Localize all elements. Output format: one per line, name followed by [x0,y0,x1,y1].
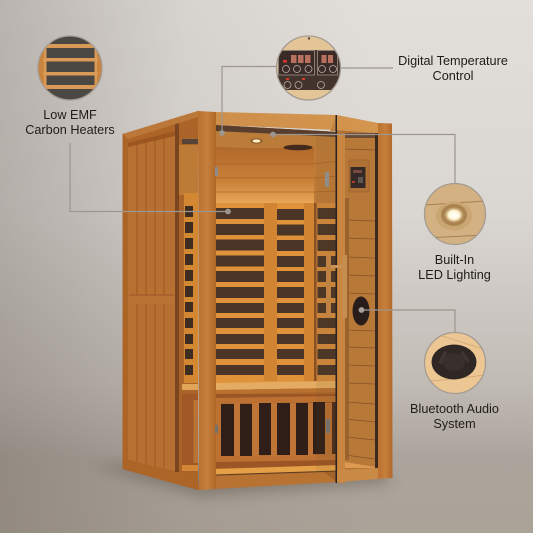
label: low EMF carbon heaters: Carbon Heaters [25,123,115,137]
label: digital temperature control: Digital Temperature [398,54,508,68]
leader line: temperature control left [219,66,276,136]
ceiling speaker vent [284,145,312,150]
label: built-in LED lighting [418,253,491,282]
label: built-in LED lighting: LED Lighting [418,268,491,282]
glass door edge and hardware [215,115,347,483]
under-bench heaters [216,394,338,475]
leader line: LED lighting [270,132,455,184]
floor shadow [90,465,392,496]
label: digital temperature control [398,54,508,83]
label: bluetooth audio system: System [433,417,476,431]
bench [216,381,338,394]
ceiling LED [250,138,262,144]
leader line: temperature control right [341,67,393,69]
label: digital temperature control: Control [433,69,473,83]
label: low EMF carbon heaters [25,108,115,137]
label: bluetooth audio system [410,402,499,431]
wall speaker [352,296,370,326]
leader line: bluetooth audio [359,307,455,333]
right wall section [337,130,378,483]
sauna cabin [122,111,392,490]
leader line: carbon heaters [70,143,231,214]
label: bluetooth audio system: Bluetooth Audio [410,402,499,416]
back wall and ceiling [216,125,338,476]
label: low EMF carbon heaters: Low EMF [43,108,97,122]
icon: carbon heater circle [37,35,104,101]
icon: digital temperature control circle [276,35,342,101]
wall control panel [349,160,369,192]
left window interior [179,125,198,474]
icon: bluetooth speaker circle [424,332,486,394]
frame top and left pillar [122,111,392,490]
back wall heaters [216,203,338,381]
left side wall [122,111,198,490]
icon: LED light circle [424,183,486,245]
label: built-in LED lighting: Built-In [435,253,474,267]
